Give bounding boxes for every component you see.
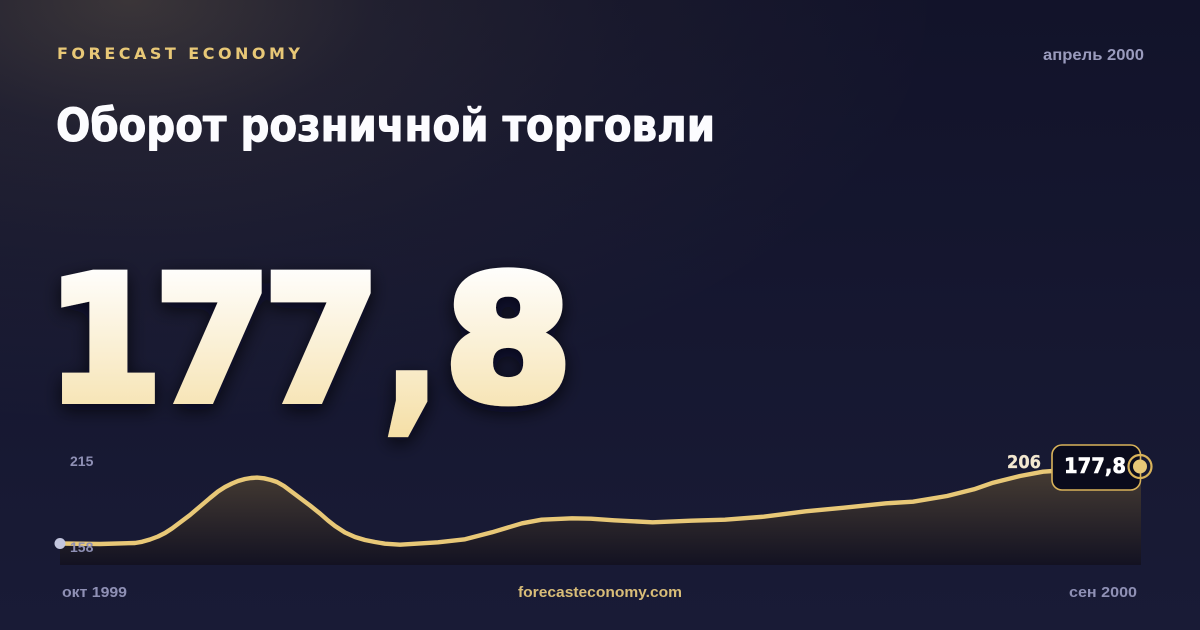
website: forecasteconomy.com bbox=[518, 584, 682, 601]
title: Оборот розничной торговли bbox=[56, 99, 715, 152]
big value: 7 bbox=[155, 240, 270, 440]
big value: 1 bbox=[47, 240, 162, 440]
date: апрель 2000 bbox=[1043, 47, 1144, 64]
current value callout bbox=[1052, 445, 1140, 490]
chart line bbox=[60, 470, 1060, 545]
current value callout: 177,8 bbox=[1064, 454, 1126, 478]
chart: retail turnover sparkline bbox=[54, 445, 1152, 565]
end date label: сен 2000 bbox=[1069, 584, 1137, 601]
brand label: FORECAST ECONOMY bbox=[57, 44, 300, 63]
axis min label: 158 bbox=[70, 539, 94, 555]
start date label: окт 1999 bbox=[62, 584, 127, 601]
big value: 7 bbox=[264, 240, 379, 440]
chart area fill bbox=[60, 466, 1141, 565]
big value bbox=[47, 237, 572, 452]
peak value label: 206 bbox=[1007, 452, 1041, 473]
start point marker bbox=[54, 538, 66, 549]
end point marker bbox=[1128, 455, 1152, 478]
big value: 8 bbox=[444, 240, 572, 440]
axis max label: 215 bbox=[70, 453, 94, 469]
big value: , bbox=[383, 237, 440, 452]
